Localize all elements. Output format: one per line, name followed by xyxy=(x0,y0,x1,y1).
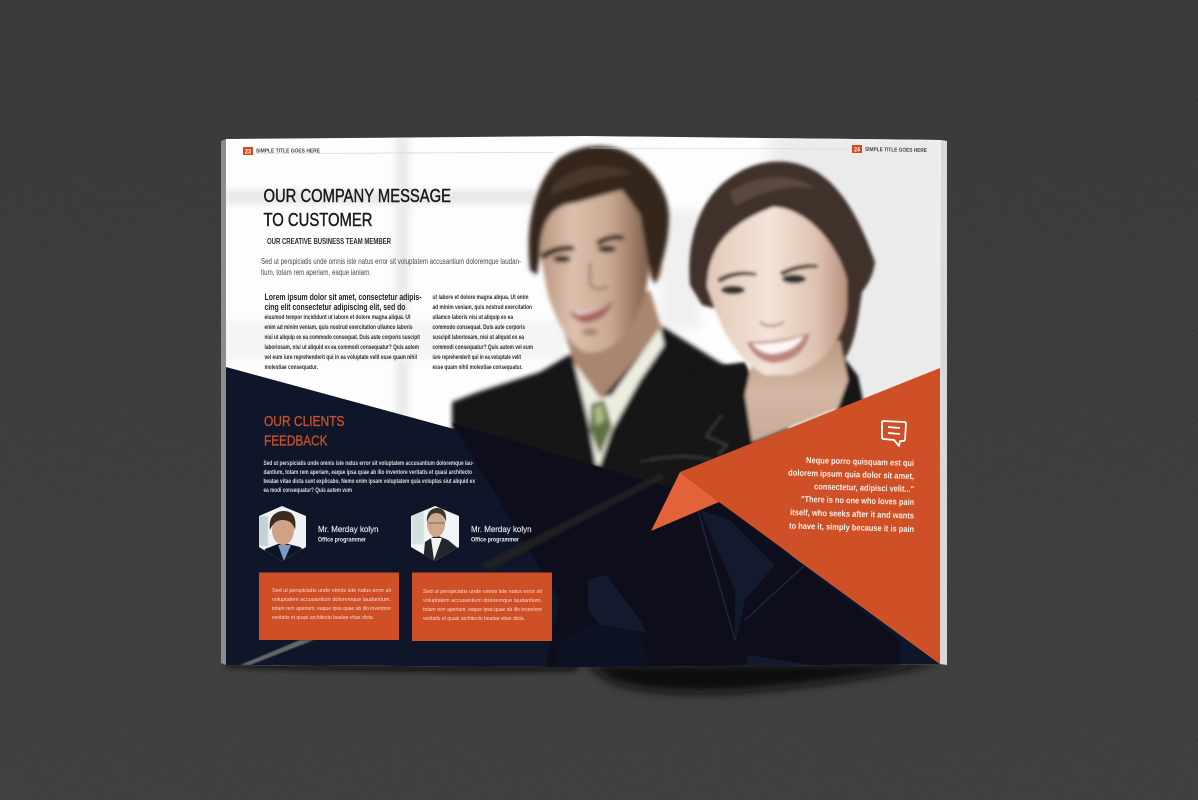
testimonial card 2: voluptatem accusantium doloremque laudantium, xyxy=(423,598,542,604)
feedback paragraph: Sed ut perspiciatis unde omnis iste natus error sit voluptatem accusantium doloremque lau- xyxy=(264,461,474,467)
quote text: consectetur, adipisci velit..." xyxy=(814,481,914,494)
person name 1: Mr. Merday kolyn xyxy=(318,524,379,534)
testimonial card 1: voluptatem accusantium doloremque laudantium, xyxy=(272,597,391,603)
jacket lapels xyxy=(700,510,775,645)
man ear xyxy=(645,262,664,284)
right header: SIMPLE TITLE GOES HERE xyxy=(865,147,927,154)
feedback heading xyxy=(264,414,344,450)
woman jacket xyxy=(652,360,790,460)
woman mouth xyxy=(747,333,810,363)
woman neck xyxy=(745,340,848,442)
left header: SIMPLE TITLE GOES HERE xyxy=(256,148,320,154)
woman hair back xyxy=(689,162,875,360)
testimonial card 1 xyxy=(259,572,399,640)
testimonial card 2: totam rem aperiam, eaque ipsa quae ab illo inventore xyxy=(423,607,542,613)
quote text: dolorem ipsum quia dolor sit amet, xyxy=(788,467,914,481)
quote fold xyxy=(651,472,719,531)
woman hair highlight xyxy=(730,177,815,206)
feedback heading: OUR CLIENTS xyxy=(264,414,344,430)
navy panel xyxy=(226,367,940,670)
subtitle: OUR CREATIVE BUSINESS TEAM MEMBER xyxy=(267,237,391,246)
man mouth xyxy=(570,301,613,323)
intro paragraph: tium, totam rem aperiam, eaque ianiam. xyxy=(261,268,371,277)
woman face xyxy=(707,207,847,375)
person name 1: Office programmer xyxy=(318,538,367,544)
left header xyxy=(243,147,554,156)
reflection streak xyxy=(480,473,665,570)
man tie xyxy=(590,400,612,455)
body column 1: molestiae consequatur. xyxy=(264,365,318,371)
feedback paragraph: beatae vitae dicta sunt explicabo. Nemo enim ipsam voluptatem quia voluptas siut aliquid ex xyxy=(264,479,476,485)
man's suit seen through navy xyxy=(452,423,900,668)
person name 1 xyxy=(318,524,379,544)
body column 1: cing elit consectetur adipiscing elit, sed do xyxy=(264,302,406,312)
body column 2: ad minim veniam, quis nostrud exercitation xyxy=(432,305,532,311)
man face xyxy=(540,190,648,353)
quote text xyxy=(788,455,914,534)
brochure page edges xyxy=(221,139,947,665)
body column 2: ullamco laboris nisi ut aliquip ex ea xyxy=(432,315,514,321)
feedback paragraph: dantium, totam rem aperiam, eaque ipsa quae ab illo inventore veritatis et quasi architecto xyxy=(264,470,472,476)
body column 1: Lorem ipsum dolor sit amet, consectetur adipis- xyxy=(264,292,422,302)
right header: 24 xyxy=(854,148,861,154)
man shirt collar xyxy=(574,328,664,465)
body column 1: nisi ut aliquip ex ea commodo consequat. Duis aute corporis suscipit xyxy=(264,335,420,341)
quote text: itself, who seeks after it and wants xyxy=(790,507,914,521)
quote text: Neque porro quisquam est qui xyxy=(806,455,914,468)
intro paragraph xyxy=(261,257,521,277)
testimonial card 1: totam rem aperiam, eaque ipsa quae ab illo inventore xyxy=(272,606,391,612)
highlight streak xyxy=(240,640,314,665)
right header xyxy=(590,145,927,154)
man eyes xyxy=(553,256,571,262)
photo: man xyxy=(440,146,790,670)
person name 2 xyxy=(471,524,532,544)
testimonial card 2 xyxy=(412,572,552,641)
body column 1: vel eum iure reprehenderit qui in ea voluptate velit esse quam nihil xyxy=(264,355,417,361)
body column 2 xyxy=(432,295,533,371)
portrait 1 xyxy=(259,506,306,561)
body column 1: eiusmod tempor incididunt ut labore et dolore magna aliqua. Ut xyxy=(264,315,410,321)
man neck xyxy=(560,290,662,400)
body column 2: commodi consequatur? Quis autem vel eum xyxy=(432,345,533,351)
quote text: to have it, simply because it is pain xyxy=(789,521,914,534)
woman nose shadow xyxy=(760,322,784,326)
page shadow under brochure xyxy=(226,662,940,693)
feedback paragraph: ea modi consequatur? Quis autem vum xyxy=(264,488,352,494)
body column 2: ut labore et dolore magna aliqua. Ut enim xyxy=(432,295,528,301)
photo: office background xyxy=(220,130,950,670)
feedback paragraph xyxy=(264,461,476,494)
person name 2: Office programmer xyxy=(471,538,520,544)
left header: 23 xyxy=(245,150,252,156)
portrait 2 xyxy=(410,505,460,563)
photo: woman xyxy=(640,162,875,490)
brochure spread xyxy=(220,130,950,670)
body column 1: enim ad minim veniam, quis nostrud exercitation ullamco laboris xyxy=(264,325,413,331)
feedback heading: FEEDBACK xyxy=(264,434,328,450)
woman eyes xyxy=(721,286,745,294)
woman top xyxy=(835,356,864,414)
woman brows xyxy=(717,264,818,283)
quote triangle xyxy=(680,368,940,664)
quote text: "There is no one who loves pain xyxy=(801,494,914,507)
man hair highlight xyxy=(552,166,632,195)
title: OUR COMPANY MESSAGE xyxy=(264,185,451,206)
body column 2: esse quam nihil molestiae consequatur. xyxy=(432,365,523,371)
woman jacket stitching xyxy=(640,415,727,462)
testimonial card 1: Sed ut perspiciatis unde omnis iste natus error sit xyxy=(272,588,391,594)
icon: speech bubble xyxy=(882,421,906,446)
body column 2: suscipit laboriosam, nisi ut aliquid ex ea xyxy=(432,335,525,341)
testimonial card 2: veritatis et quasi architecto beatae vitae dicta. xyxy=(423,616,525,622)
person name 2: Mr. Merday kolyn xyxy=(471,524,532,534)
folded hand xyxy=(588,575,646,632)
body column 1: laboriosam, nisi ut aliquid ex ea commodi consequatur? Quis autem xyxy=(264,345,419,351)
man brows xyxy=(541,235,624,260)
man hair xyxy=(529,146,669,285)
man nose shadow xyxy=(590,262,608,289)
title: TO CUSTOMER xyxy=(264,209,372,230)
body column 2: iure reprehenderit qui in ea voluptate velit xyxy=(432,355,521,361)
body column 2: commodo consequat. Duis aute corporis xyxy=(432,325,526,331)
man suit xyxy=(440,325,790,670)
body column 1 xyxy=(264,292,422,371)
woman teeth xyxy=(752,336,804,354)
title xyxy=(264,185,451,230)
testimonial card 2: Sed ut perspiciatis unde omnis iste natus error sit xyxy=(423,589,542,595)
testimonial card 1: veritatis et quasi architecto beatae vitae dicta. xyxy=(272,615,374,621)
orange quote panel xyxy=(651,368,940,664)
intro paragraph: Sed ut perspiciatis unde omnis iste natus error sit voluptatem accusantium doloremque laudan- xyxy=(261,257,521,266)
